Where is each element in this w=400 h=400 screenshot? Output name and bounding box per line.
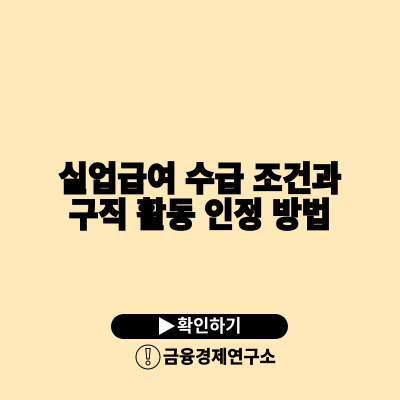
brand name: 금융경제연구소 (163, 347, 276, 367)
button (111, 314, 288, 339)
title (58, 160, 342, 234)
title line 2: 구직 활동 인정 방법 (69, 196, 331, 234)
brand logo (136, 344, 276, 370)
title line 1: 실업급여 수급 조건과 (59, 160, 341, 198)
button label: 확인하기 (177, 316, 241, 336)
icon: play triangle (159, 317, 175, 335)
icon: exclamation circle (136, 344, 160, 370)
